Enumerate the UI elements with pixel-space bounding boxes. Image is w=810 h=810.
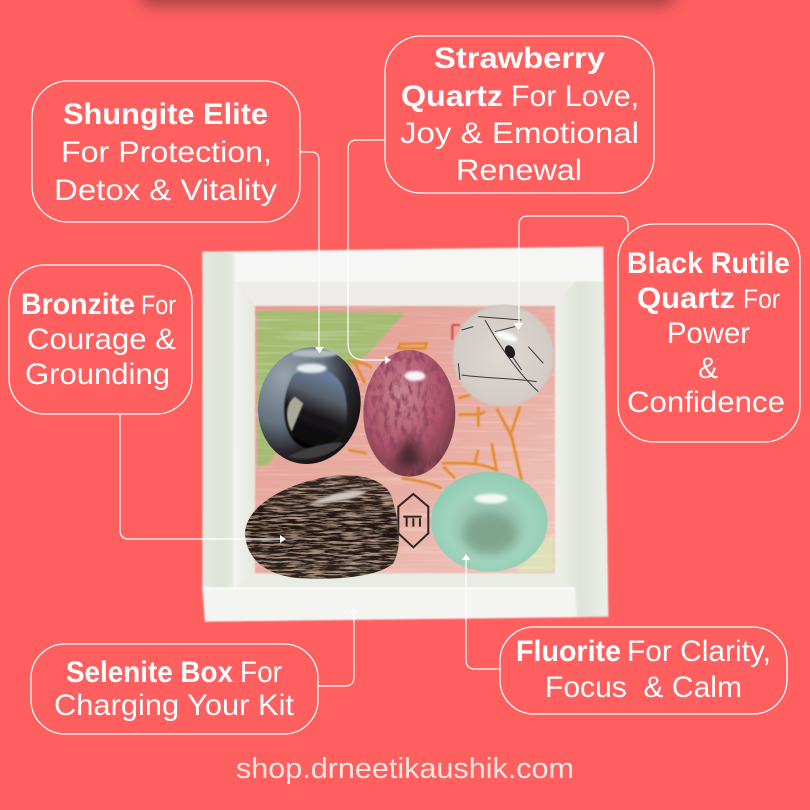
callout: strawberry quartz: Renewal xyxy=(456,154,582,187)
callout: strawberry quartz: Joy & Emotional xyxy=(400,117,639,150)
selenite box frame xyxy=(202,247,608,622)
callout: fluorite: Fluorite xyxy=(516,635,621,668)
callout: black rutile quartz: Quartz xyxy=(637,282,735,315)
arrow: fluorite xyxy=(462,554,500,669)
callout: bronzite: Grounding xyxy=(25,358,170,391)
callout: strawberry quartz: Quartz xyxy=(401,80,503,113)
callout: bronzite: Bronzite xyxy=(21,288,135,321)
callout: selenite box: For xyxy=(240,656,282,689)
callout: fluorite: For Clarity, xyxy=(627,635,771,668)
arrow: shungite xyxy=(300,152,324,353)
callout: shungite elite: Detox & Vitality xyxy=(54,174,277,207)
website url: shop.drneetikaushik.com xyxy=(236,753,574,785)
arrow: black rutile quartz xyxy=(514,216,628,330)
callout: shungite elite: Shungite Elite xyxy=(63,98,268,131)
callout: black rutile quartz: For xyxy=(743,284,780,314)
callout: bronzite: Courage & xyxy=(27,323,176,356)
callout: black rutile quartz: & xyxy=(698,352,718,385)
photo: selenite box with five stones xyxy=(202,247,608,622)
stone: fluorite xyxy=(431,472,548,572)
callout: fluorite: Focus & Calm xyxy=(545,671,742,704)
callout: fluorite xyxy=(500,627,787,714)
callout: black rutile quartz: Confidence xyxy=(627,386,785,419)
callout: selenite box: Charging Your Kit xyxy=(54,689,295,722)
callout: black rutile quartz: Black Rutile xyxy=(627,247,790,280)
callout: shungite elite: For Protection, xyxy=(61,136,272,169)
stone: strawberry quartz xyxy=(363,350,455,477)
callout: strawberry quartz xyxy=(385,36,654,193)
stone: shungite xyxy=(247,338,371,474)
stone: black rutile quartz xyxy=(453,305,554,407)
printed card with chakra drawing xyxy=(255,306,555,573)
callout: black rutile quartz xyxy=(618,224,800,442)
callout: strawberry quartz: For Love, xyxy=(511,80,639,113)
top shadow band xyxy=(140,0,675,6)
callout: strawberry quartz: Strawberry xyxy=(434,42,605,75)
callout: black rutile quartz: Power xyxy=(667,317,750,350)
callout: bronzite xyxy=(9,265,192,414)
arrow: strawberry quartz xyxy=(348,140,391,364)
callout: shungite elite xyxy=(32,81,300,222)
arrow: bronzite xyxy=(120,414,286,543)
arrow: selenite box xyxy=(318,607,358,686)
stone: bronzite xyxy=(245,475,399,579)
callout: selenite box: Selenite Box xyxy=(66,656,233,689)
callout: bronzite: For xyxy=(141,290,176,320)
callout: selenite box xyxy=(31,644,318,734)
